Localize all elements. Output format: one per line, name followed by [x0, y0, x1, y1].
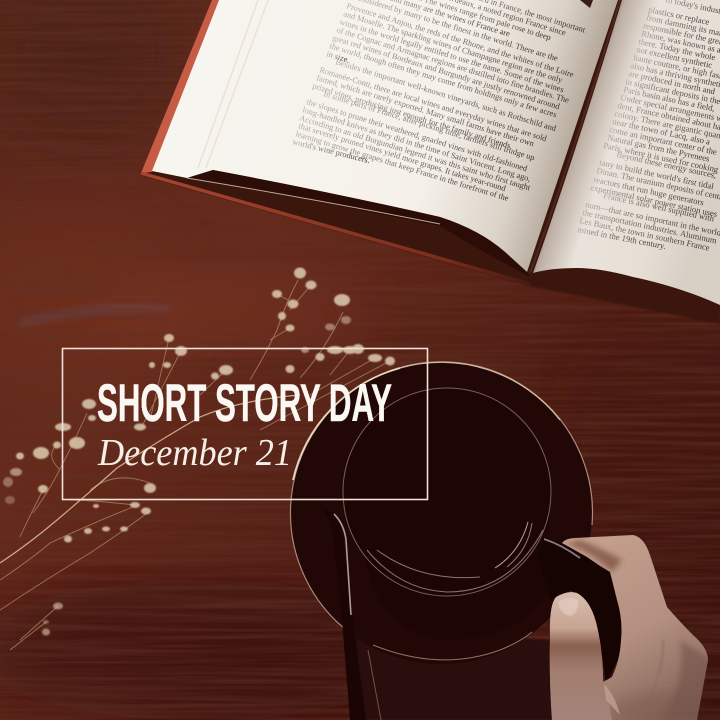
hand shape: [550, 535, 708, 720]
cup handle: [538, 538, 624, 686]
right page text: mined in the 19th century.: [577, 224, 667, 251]
shadow below the cup and spoon: [350, 628, 552, 720]
right page text: there. Today the whole: [638, 36, 717, 62]
right page text: [577, 0, 720, 253]
left page text: famed, which are rarely exported. Many small farms have their own: [315, 73, 536, 149]
finger underside shadow: [565, 540, 622, 572]
right page text: Beyond these energy sources,: [616, 149, 717, 180]
coffee cup on saucer: [290, 362, 624, 720]
right page text: reactors that run huge generators: [593, 174, 705, 208]
left page text: world's wine producers.: [292, 137, 371, 165]
title: Short Story Day: SHORT STORY DAY: [97, 374, 392, 433]
right page text: Les Baux, the town in southern France: [579, 215, 711, 253]
thumb: [550, 592, 612, 720]
dried flower sprigs: [0, 268, 395, 650]
right page text: in significant deposits in the: [625, 76, 720, 106]
left page text: Provence and Anjou, the reds of the Rhone, and the whites of the Loire: [345, 1, 575, 79]
right page text: France is also well supplied with: [603, 190, 716, 224]
left page text: [292, 0, 587, 203]
right page text: near the town of Lacq, also a: [612, 116, 711, 147]
saucer lower rim: [373, 632, 532, 660]
right page text: experimental solar power station uses: [590, 182, 719, 219]
right page text: Rhone, was known as a: [641, 28, 720, 55]
date: December 21: December 21: [97, 432, 292, 474]
shadowed underside of book: [141, 0, 720, 324]
right page text: plastics or replace: [648, 4, 711, 27]
spoon: [320, 506, 366, 720]
left page text: long-handled knives as they did in the time of Saint Vincent. Long ago,: [301, 105, 532, 184]
cup body: [343, 388, 551, 596]
right page text: are produced in north and: [628, 68, 717, 96]
flower clusters: [3, 268, 395, 636]
saucer rim highlight: [293, 368, 400, 480]
left page text: the slopes to prune their weathered, gnarled vines with old-fashioned: [305, 97, 529, 173]
cup rim: [343, 388, 551, 596]
left page text: learning to grow the grapes that keep France in the forefront of the: [294, 129, 510, 203]
right page text: Paris basin also has a field,: [623, 84, 716, 113]
left page text: Romanée-Conti, there are local wines and everyday wines that are sold: [318, 65, 548, 143]
left page text: Besides the important well-known vineyards, such as Rothschild and: [334, 57, 558, 133]
left page text: and Moselle. The sparkling wines of Champagne region are the only: [342, 9, 564, 85]
lower hand shadow: [619, 696, 665, 716]
right page text: not excellent synthetic: [636, 44, 713, 70]
page stack edge line: [187, 178, 440, 224]
right page text: Paris, where it is used for cooking: [603, 140, 720, 174]
left page text: that severely pruned vines yield more grapes. It takes year-round: [297, 121, 508, 193]
left page text: of the Cognac and Armagnac regions are distilled into fine brandies. The: [335, 25, 570, 105]
hand holding the cup: [550, 535, 712, 720]
page fold creases: [198, 0, 268, 168]
left page text: According to an old Burgundian legend it was this saint who first taught: [298, 113, 532, 193]
hand shading: [550, 540, 712, 720]
left page text: wines in the world legally entitled to use the name. Some of the wines: [338, 17, 565, 94]
right page text: come an important center of the: [609, 124, 718, 157]
red cover bottom edge: [141, 173, 530, 284]
saucer: [290, 362, 592, 664]
left page text: great red wines of Bordeaux and Burgundy are justly renowned around: [331, 33, 562, 111]
right hand edge shadow: [666, 641, 708, 718]
page stack shadow: [187, 170, 530, 277]
open book: [141, 0, 720, 324]
title frame: [62, 348, 428, 500]
right page text: tany to build the world's first tidal: [599, 157, 715, 191]
left page text: In some parts of France, after picking time, farmers still trudge up: [322, 89, 536, 162]
left page text: in size.: [325, 49, 351, 65]
right page text: num—that are so important in the world: [585, 199, 720, 238]
main bright stem: [0, 395, 300, 563]
bookmark: [580, 0, 593, 8]
red cover spine: [141, 0, 219, 173]
right page text: the transportation industries. Aluminum: [582, 207, 718, 246]
left page text: the world, though often they may come from holdings only a few acres: [328, 41, 558, 119]
gutter: [530, 0, 620, 273]
right page: [533, 0, 720, 305]
left page text: prized vines, producing just enough for the family and friends.: [311, 81, 514, 151]
left page: [152, 0, 618, 272]
inner rim highlights: [377, 550, 480, 578]
right page text: Natural gas from the Pyrenees: [607, 132, 711, 164]
stems: [0, 280, 390, 650]
web between thumb and finger: [604, 684, 620, 715]
